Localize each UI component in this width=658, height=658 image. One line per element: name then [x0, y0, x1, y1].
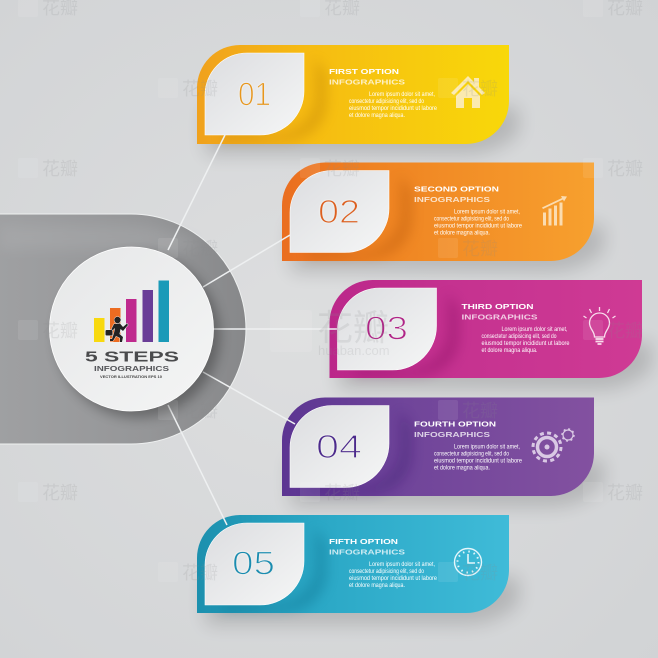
title: 5 steps: 5 STEPS [85, 348, 179, 366]
watermarks: 花瓣 [182, 79, 218, 99]
number leaf: 04 [316, 428, 362, 465]
body text [482, 327, 570, 354]
icon: running businessman [106, 317, 128, 342]
watermarks: 花瓣 [324, 159, 360, 179]
watermarks: 花瓣 [607, 159, 643, 179]
panel: fifth option [197, 515, 519, 625]
watermarks: 花瓣 [607, 321, 643, 341]
heading [329, 67, 405, 86]
card background [282, 162, 594, 261]
watermarks: 花瓣 [182, 563, 218, 583]
card background [197, 515, 509, 613]
body text: Lorem ipsum dolor sit amet, [454, 210, 520, 216]
card background [282, 398, 594, 496]
body text: et dolore magna aliqua. [434, 466, 490, 472]
card background [197, 45, 509, 144]
heading [462, 302, 538, 322]
watermarks: 花瓣 [607, 483, 643, 503]
body text: eiusmod tempor incididunt ut labore [434, 224, 523, 230]
icon: gears [533, 429, 574, 461]
body text: Lorem ipsum dolor sit amet, [502, 327, 568, 333]
body text: Lorem ipsum dolor sit amet, [369, 562, 435, 568]
body text: et dolore magna aliqua. [349, 583, 405, 589]
body text: consectetur adipisicing elit, sed do [434, 216, 510, 222]
body text: Lorem ipsum dolor sit amet, [454, 444, 520, 450]
body text [349, 562, 438, 589]
watermarks: 花瓣 [462, 239, 498, 259]
panel: grey half-round backdrop [0, 214, 246, 444]
card background [330, 280, 642, 378]
heading: INFOGRAPHICS [414, 195, 490, 204]
watermarks: 花瓣 [42, 321, 78, 341]
body text: Lorem ipsum dolor sit amet, [369, 92, 435, 98]
watermarks: 花瓣 [324, 483, 360, 503]
heading: INFOGRAPHICS [329, 78, 405, 86]
panel: fourth option [282, 398, 604, 508]
watermarks: 花瓣 [462, 79, 498, 99]
number leaf: 01 [238, 76, 271, 112]
central disc shadow [56, 254, 220, 418]
body text: eiusmod tempor incididunt ut labore [349, 576, 438, 582]
panel: first option [197, 45, 519, 155]
number leaf: 02 [318, 193, 360, 230]
heading [329, 537, 405, 556]
icon: light bulb [584, 307, 616, 344]
heading: INFOGRAPHICS [462, 312, 538, 322]
body text: consectetur adipisicing elit, sed do [482, 334, 557, 340]
body text: et dolore magna aliqua. [482, 348, 538, 354]
number leaf [338, 288, 436, 370]
panel: second option [282, 162, 604, 272]
watermarks: 花瓣 [317, 307, 389, 348]
number leaf [290, 406, 389, 488]
body text: consectetur adipisicing elit, sed do [434, 452, 510, 458]
subtitle: INFOGRAPHICS [94, 364, 169, 373]
panel: third option [330, 280, 652, 390]
number leaf [205, 523, 304, 605]
body text: et dolore magna aliqua. [434, 230, 490, 236]
heading: SECOND OPTION [414, 184, 499, 194]
body text: et dolore magna aliqua. [349, 113, 405, 119]
heading [414, 420, 496, 439]
body text [434, 444, 523, 472]
connector lines [168, 135, 337, 525]
watermarks: 花瓣 [182, 401, 218, 421]
body text: consectetur adipisicing elit, sed do [349, 569, 425, 575]
panel: central disc [50, 247, 214, 411]
heading: FOURTH OPTION [414, 420, 496, 428]
watermarks: 花瓣 [462, 563, 498, 583]
watermarks: 花瓣 [42, 483, 78, 503]
body text: eiusmod tempor incididunt ut labore [349, 106, 438, 112]
number leaf: 05 [232, 544, 275, 582]
number leaf [290, 170, 389, 252]
watermarks: 花瓣 [42, 159, 78, 179]
heading: FIRST OPTION [329, 67, 399, 76]
watermarks: huaban.com [318, 343, 390, 358]
body text [434, 210, 523, 236]
heading [414, 184, 499, 204]
heading: INFOGRAPHICS [414, 430, 490, 439]
number leaf: 03 [365, 310, 408, 346]
caption: VECTOR ILLUSTRATION EPS 10 [100, 375, 162, 379]
icon: house [451, 76, 485, 108]
body text: eiusmod tempor incididunt ut labore [482, 341, 570, 347]
number leaf [205, 53, 304, 135]
icon: growth chart [542, 196, 567, 226]
watermarks: 花瓣 [182, 239, 218, 259]
body text: eiusmod tempor incididunt ut labore [434, 458, 523, 464]
body text [349, 92, 438, 119]
icon: clock [454, 548, 482, 576]
heading: INFOGRAPHICS [329, 548, 405, 556]
bar chart [94, 280, 169, 342]
heading: THIRD OPTION [462, 302, 534, 311]
heading: FIFTH OPTION [329, 537, 398, 546]
watermarks: 花瓣 [462, 401, 498, 421]
body text: consectetur adipisicing elit, sed do [349, 99, 425, 105]
